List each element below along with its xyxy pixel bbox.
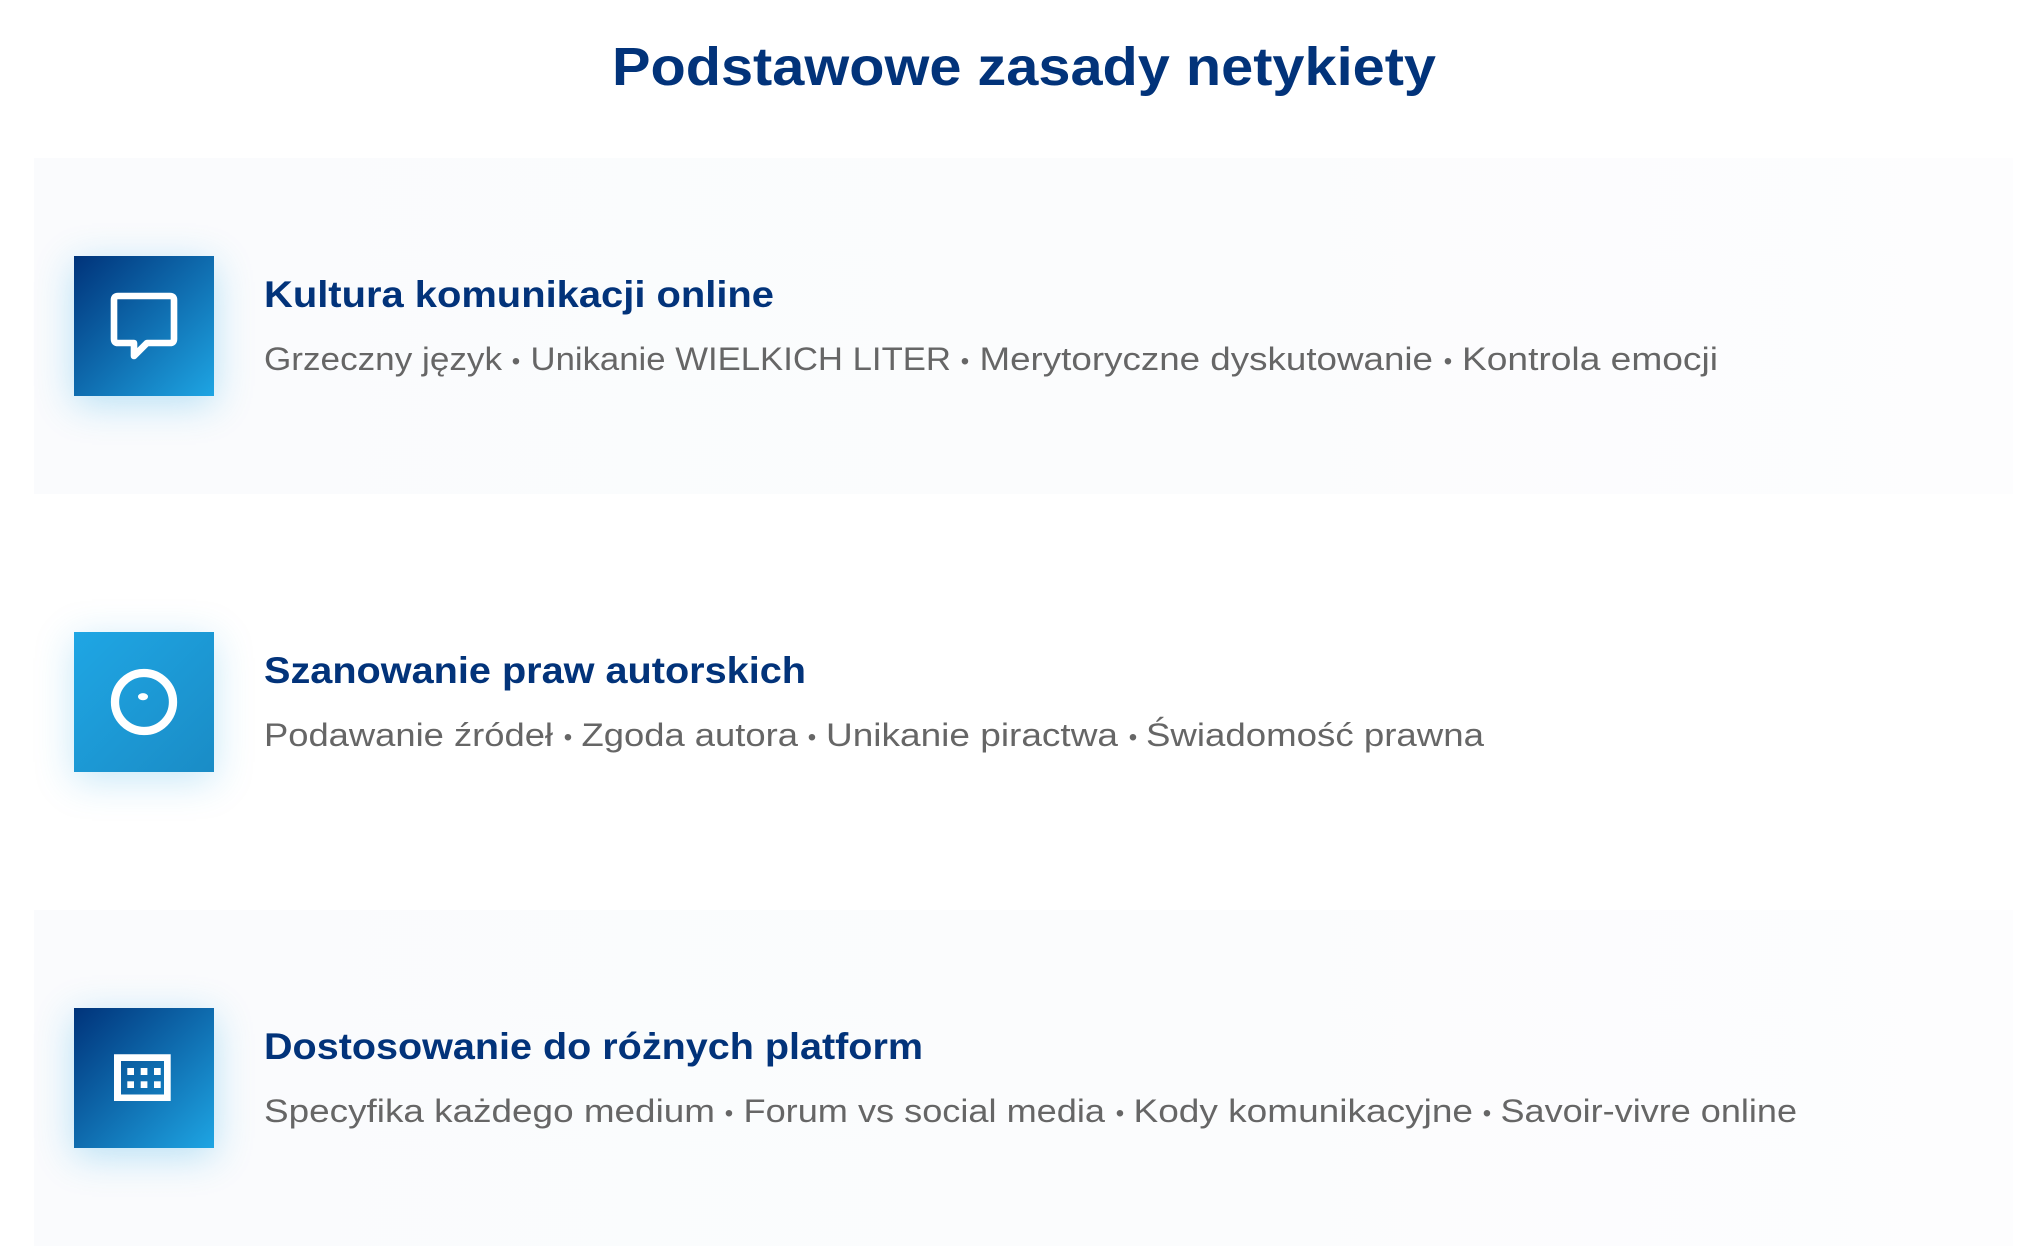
text: Szanowanie praw details: Zgoda autora [582, 717, 798, 753]
text: Szanowanie praw details [264, 716, 1484, 753]
text: Kultura komunikacji details: • [1444, 348, 1452, 375]
text: Kultura komunikacji details: Kontrola emocji [1462, 341, 1718, 377]
icon: circle with dot [74, 632, 214, 772]
text: Szanowanie praw details: Podawanie źródeł [264, 717, 553, 753]
text: Dostosowanie details [264, 1093, 1797, 1129]
text: Kultura komunikacji details: Unikanie WIELKICH LITER [530, 341, 951, 377]
text: Dostosowanie details: Forum vs social media [744, 1093, 1105, 1129]
panel: Dostosowanie do różnych platform [34, 910, 2013, 1246]
icon: speech bubble [74, 256, 214, 396]
text: Szanowanie praw details: • [564, 724, 572, 751]
text: Kultura komunikacji details: Grzeczny język [264, 341, 503, 377]
heading: Kultura komunikacji online: Kultura komunikacji online [264, 274, 774, 315]
icon: grid window [74, 1008, 214, 1148]
panel: Szanowanie praw autorskich [54, 620, 1484, 800]
text: Kultura komunikacji details: • [512, 348, 520, 375]
text: Kultura komunikacji details: Merytoryczne dyskutowanie [980, 341, 1433, 377]
text: Szanowanie praw details: Unikanie piractwa [826, 717, 1118, 753]
text: Dostosowanie details: Specyfika każdego medium [264, 1093, 715, 1129]
title: Podstawowe zasady netykiety [612, 37, 1436, 97]
text: Dostosowanie details: • [1116, 1100, 1124, 1127]
text: Dostosowanie details: • [1483, 1100, 1491, 1127]
text: Szanowanie praw details: Świadomość prawna [1146, 717, 1484, 753]
text: Kultura komunikacji details [264, 341, 1718, 377]
heading: Dostosowanie do różnych platform: Dostosowanie do różnych platform [264, 1026, 923, 1067]
text: Kultura komunikacji details: • [961, 348, 969, 375]
text: Dostosowanie details: • [725, 1100, 733, 1127]
text: Szanowanie praw details: • [808, 724, 816, 751]
panel: Kultura komunikacji online [34, 158, 2013, 494]
text: Dostosowanie details: Savoir-vivre online [1500, 1093, 1797, 1129]
text: Szanowanie praw details: • [1129, 724, 1137, 751]
heading: Szanowanie praw autorskich: Szanowanie praw autorskich [264, 650, 806, 691]
text: Dostosowanie details: Kody komunikacyjne [1134, 1093, 1473, 1129]
